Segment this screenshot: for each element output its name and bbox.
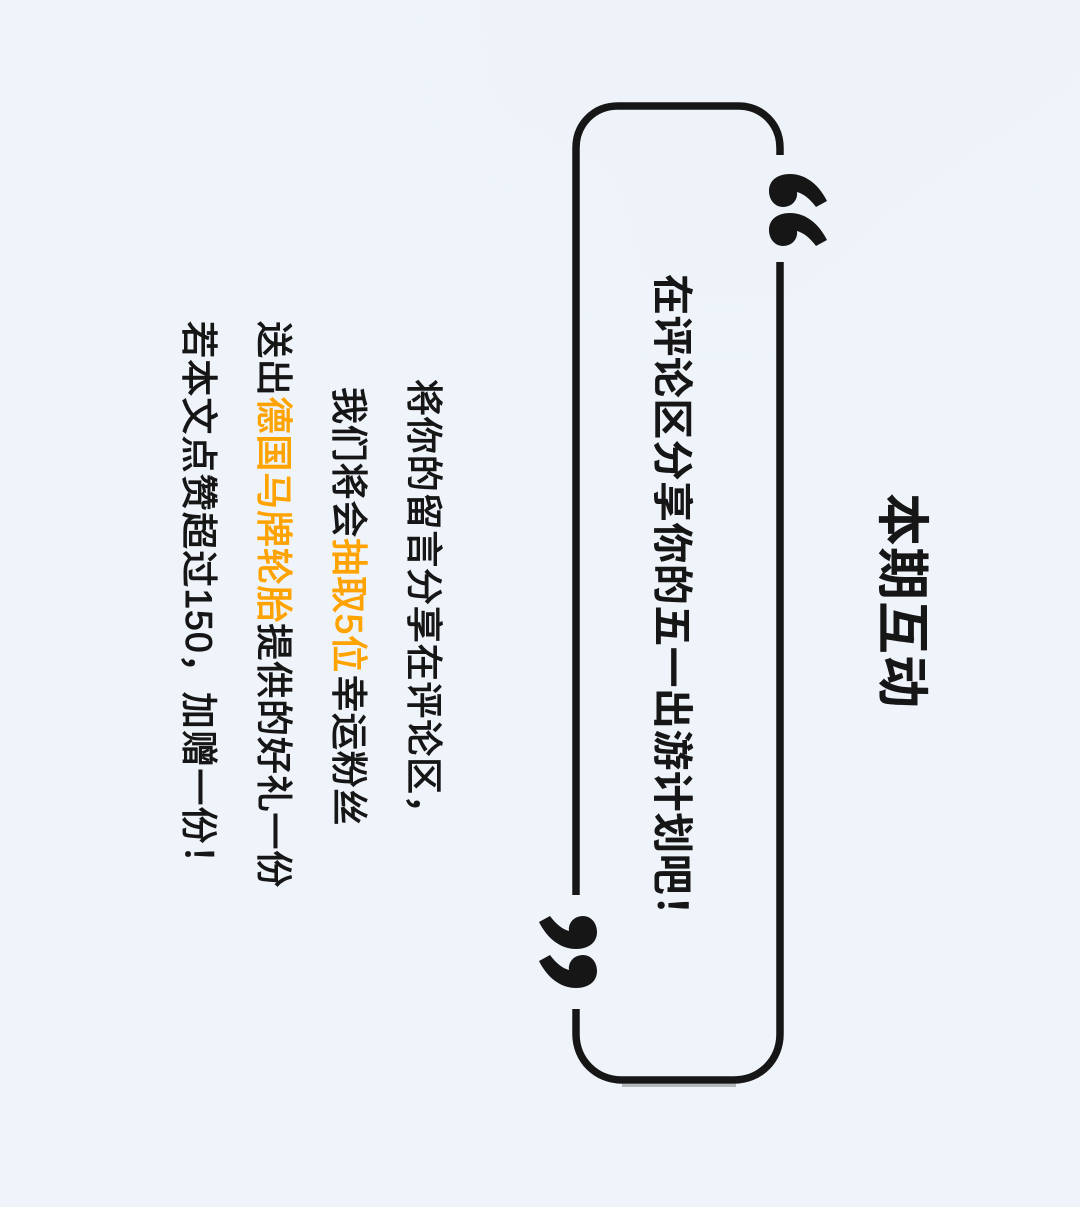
quote question text: 在评论区分享你的五一出游计划吧！	[649, 274, 695, 936]
quote frame	[576, 106, 780, 1087]
body text	[178, 321, 444, 888]
line 3: 送出 德国马牌轮胎 提供的好礼一份	[253, 321, 294, 888]
heading: 本期互动	[872, 493, 931, 709]
line 4: 若本文点赞超过150，加赠一份！	[178, 321, 219, 883]
line 1: 将你的留言分享在评论区，	[403, 379, 444, 833]
icon: closing quotation marks	[539, 916, 597, 988]
icon: opening quotation marks	[769, 174, 827, 246]
line 2: 我们将会 抽取5位 幸运粉丝	[328, 387, 369, 826]
